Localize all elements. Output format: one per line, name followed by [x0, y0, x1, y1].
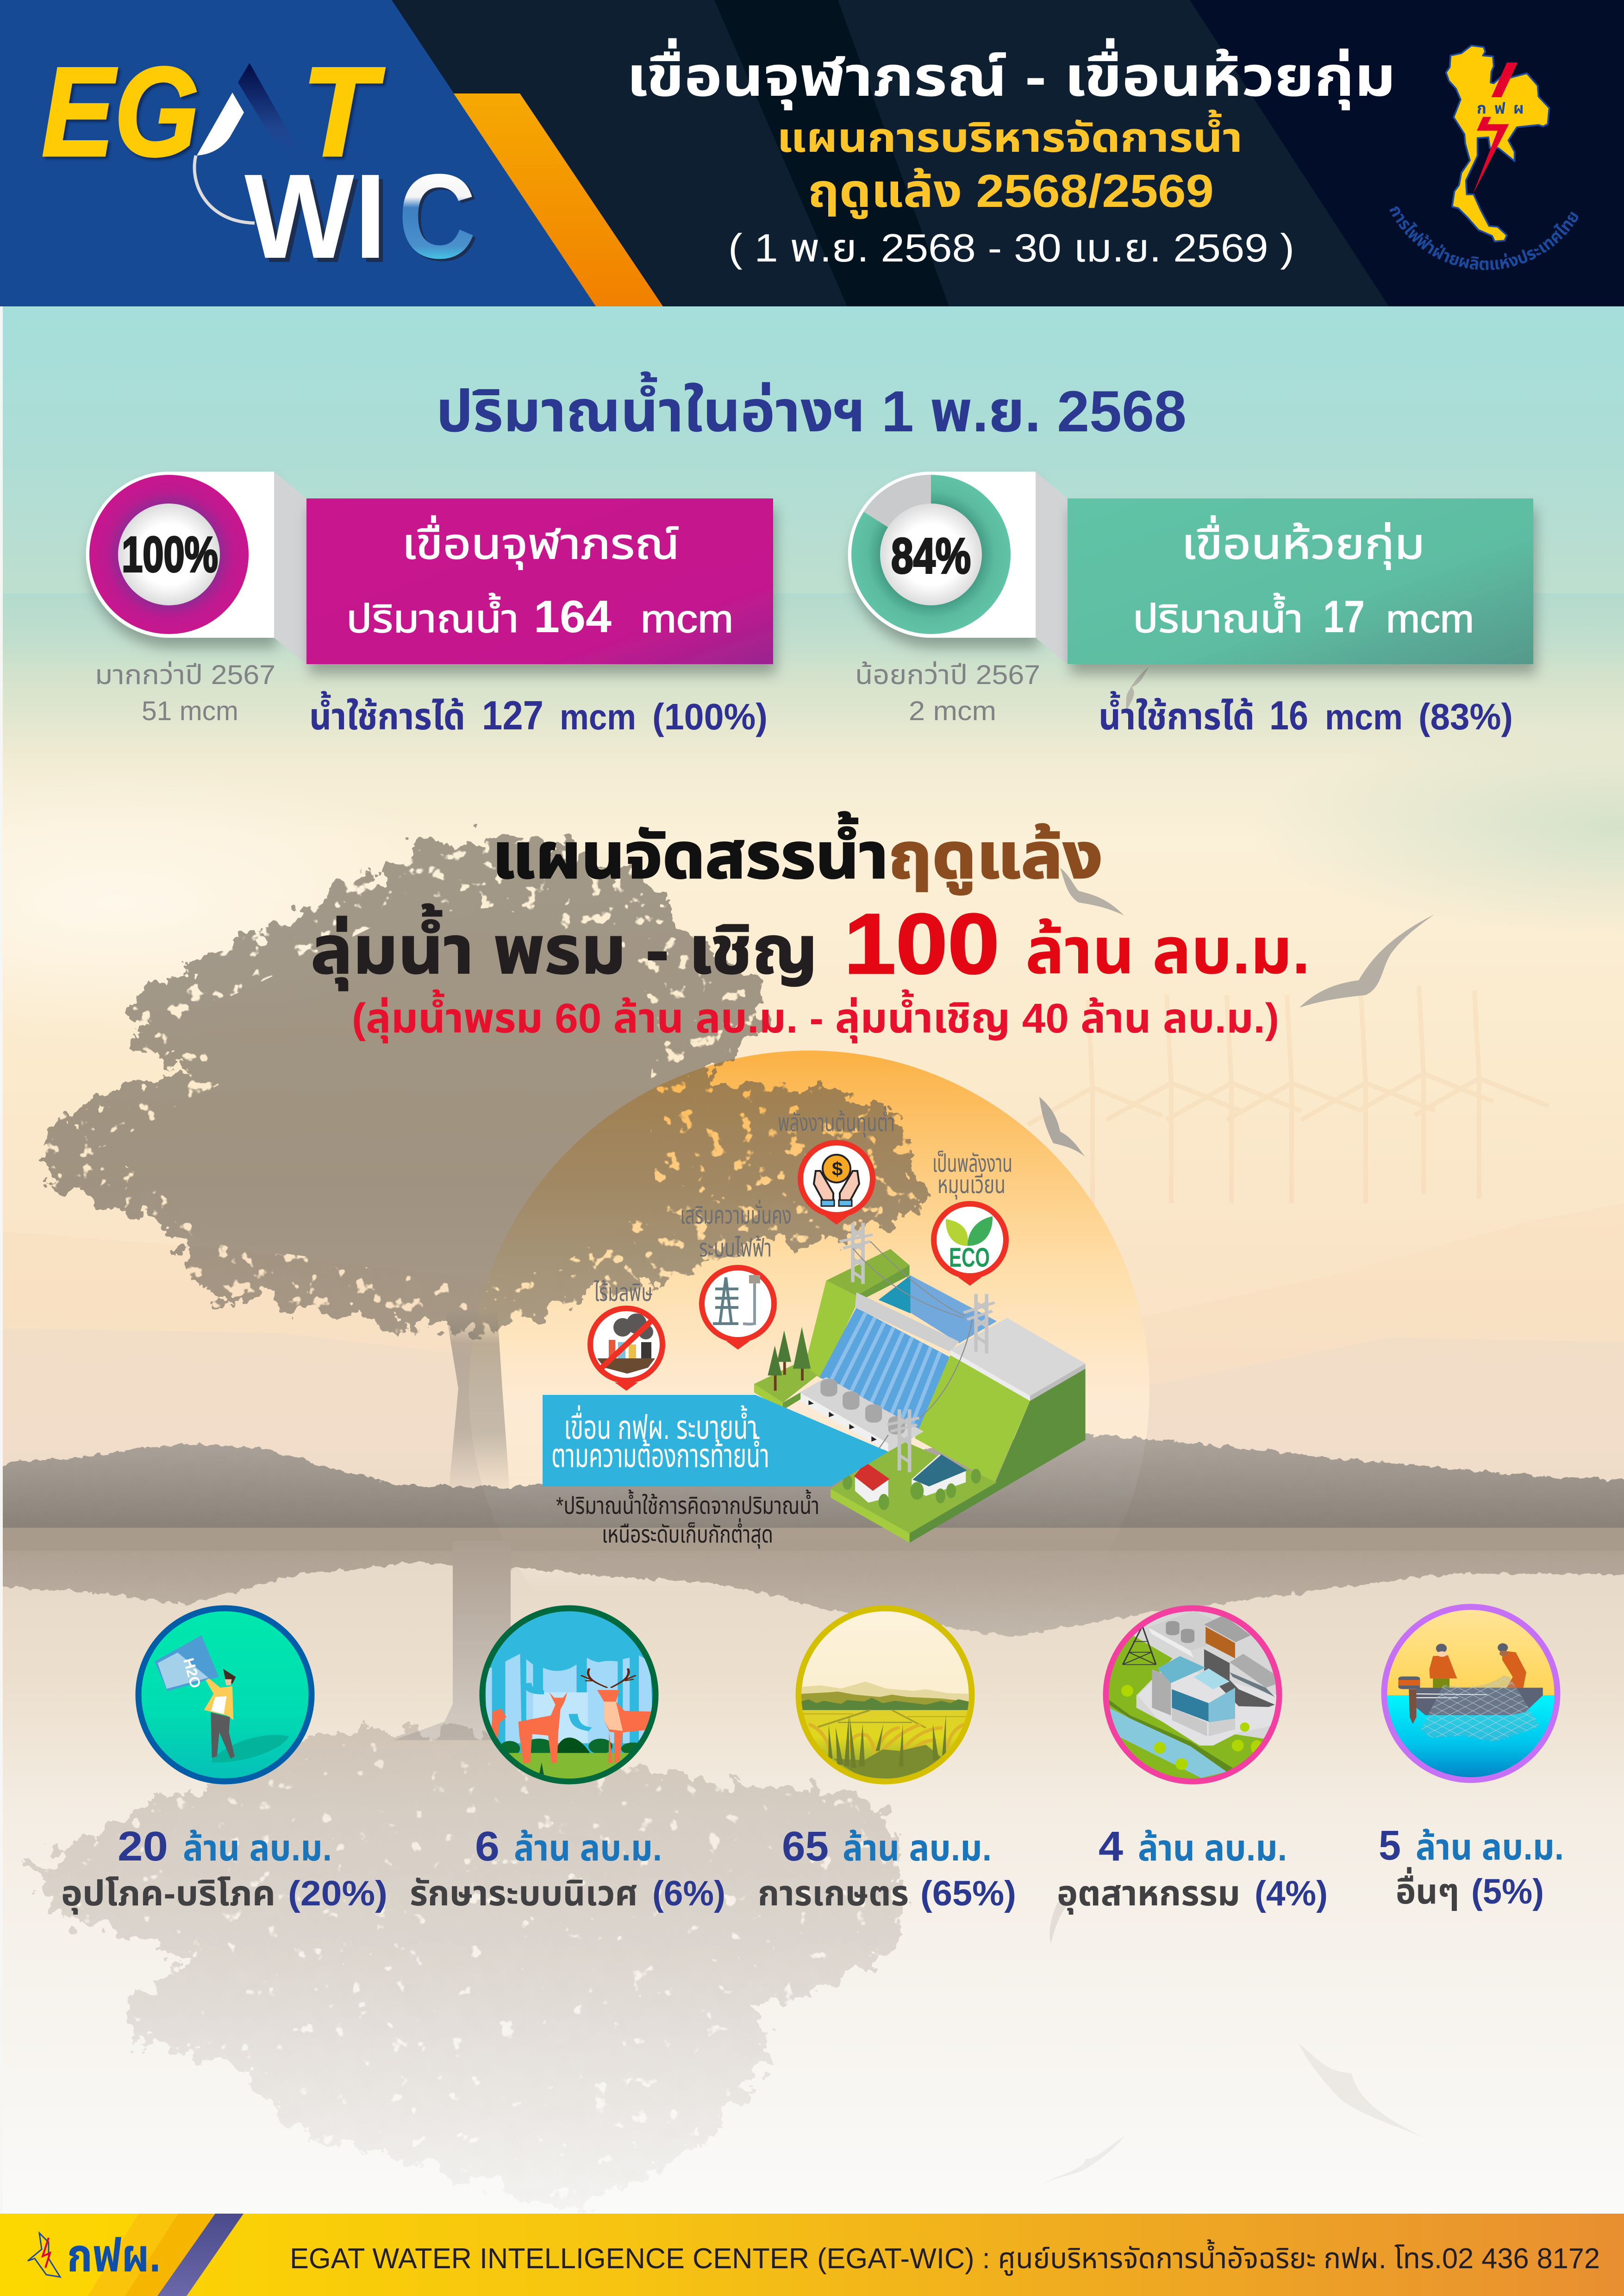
header dark bands [714, 0, 1624, 306]
wind turbines [1028, 986, 1549, 1208]
magenta name box: ปริมาณน้ำ [346, 593, 519, 641]
stat: agriculture 65 [758, 1823, 1016, 1913]
tree reflection [31, 1541, 901, 2209]
EGAT emblem: Thailand map: ก ฟ ผ [1477, 100, 1524, 118]
year comparison: 51 mcm [142, 696, 238, 726]
usage circle: others (fishing) [1384, 1607, 1557, 1783]
donut card 100%: 100% [122, 526, 218, 582]
powerhouse [800, 1377, 924, 1452]
stat: consumption 20: อุปโภค-บริโภค [61, 1874, 275, 1915]
heading: dry season allocation plan: 100 [844, 896, 999, 992]
year comparison [855, 660, 1040, 726]
dam illustration [754, 1223, 1086, 1543]
blue release arrow callout: ตามความต้องการท้ายน้ำ [551, 1433, 769, 1475]
teal name box: mcm [1386, 597, 1474, 641]
pin: renewable eco energy: หมุนเวียน [937, 1171, 1006, 1200]
dam spillway face [819, 1292, 959, 1431]
title lines: ฤดูแล้ง 2568/2569 [808, 165, 1214, 219]
heading: dry season allocation plan: (ลุ่มน้ำพรม 60 ล้าน ลบ.ม. - ลุ่มน้ำเชิญ 40 ล้าน ลบ.ม.) [352, 989, 1279, 1044]
teal name box: ปริมาณน้ำ [1133, 593, 1303, 641]
magenta name box: เขื่อนจุฬาภรณ์ [402, 516, 680, 570]
stat: others 5: 5 [1379, 1823, 1401, 1869]
usable water: 16 [1269, 692, 1308, 738]
usage circle: consumption [138, 1608, 312, 1781]
panel: Huai Kum dam [848, 472, 1533, 738]
magenta name box [306, 498, 773, 664]
usage circle: agriculture [799, 1608, 972, 1781]
usable water: 127 [482, 692, 543, 738]
stat: consumption 20: (20%) [288, 1874, 387, 1913]
distant hills [0, 1203, 1624, 1527]
title lines [626, 38, 1396, 270]
stat: others 5 [1379, 1823, 1564, 1911]
stat: ecosystem 6: (6%) [652, 1874, 725, 1913]
blue logo panel [0, 0, 596, 306]
donut card 84% [848, 472, 1068, 664]
pin: low cost energy: พลังงานต้นทุนต่ำ [778, 1106, 895, 1138]
heading: dry season allocation plan: ฤดูแล้ง [888, 821, 1103, 895]
usable water: mcm [560, 697, 636, 737]
pin: low cost energy: $ [832, 1158, 843, 1180]
panel: Chulabhorn dam [86, 472, 773, 738]
logo: EGAT WIC: C [398, 149, 476, 284]
footer logo: กฟผ. [67, 2230, 161, 2282]
heading: water in reservoirs: ปริมาณน้ำในอ่างฯ 1 พ.ย. 2568 [436, 371, 1187, 444]
small islet with trees [754, 1327, 818, 1410]
horizon water band [0, 1528, 1624, 1551]
left hill [804, 1249, 910, 1379]
teal name box: 17 [1323, 591, 1365, 642]
heading: dry season allocation plan: ล้าน ลบ.ม. [1025, 915, 1310, 987]
stat: consumption 20: ล้าน ลบ.ม. [183, 1828, 332, 1868]
sky glow patches [0, 593, 1624, 1041]
footer stripes [88, 2214, 244, 2296]
bottom land [831, 1440, 1086, 1543]
pin: power system security: เสริมความมั่นคง [680, 1200, 792, 1229]
blue release arrow callout [543, 1395, 888, 1487]
pin: no pollution [590, 1279, 662, 1391]
heading: dry season allocation plan: แผนจัดสรรน้ำ [492, 811, 888, 892]
usage circle: industry [1097, 1608, 1284, 1785]
magenta name box: mcm [641, 597, 733, 641]
year comparison: มากกว่าปี 2567 [95, 660, 275, 690]
pin: renewable eco energy: เป็นพลังงาน [932, 1150, 1012, 1177]
usable water [309, 691, 768, 738]
stat: agriculture 65: ล้าน ลบ.ม. [843, 1828, 992, 1868]
stat: consumption 20 [61, 1823, 387, 1915]
heading: dry season allocation plan: ลุ่มน้ำ พรม - เชิญ [311, 903, 818, 991]
stat: agriculture 65: 65 [782, 1823, 829, 1870]
foreground mountains [0, 1434, 1624, 1541]
title lines: แผนการบริหารจัดการน้ำ [777, 109, 1243, 161]
donut card 100% [86, 472, 306, 664]
usable water: (100%) [652, 696, 768, 737]
stat: industry 4: ล้าน ลบ.ม. [1138, 1828, 1287, 1868]
usable water: น้ำใช้การได้ [309, 691, 465, 737]
sun glow over mountains [469, 1051, 1149, 1731]
pin: no pollution: ไร้มลพิษ [593, 1279, 653, 1307]
footnote [556, 1489, 819, 1549]
right embankment [915, 1318, 1086, 1484]
birds [1039, 666, 1435, 2184]
usage circle: ecosystem [482, 1608, 661, 1781]
blue release arrow callout: เขื่อน กฟผ. ระบายน้ำ [564, 1405, 757, 1446]
heading: dry season allocation plan [311, 811, 1310, 1044]
pin: renewable eco energy: ECO [949, 1243, 990, 1273]
stat: ecosystem 6 [410, 1823, 725, 1913]
stat: industry 4 [1057, 1823, 1328, 1915]
logo: EGAT WIC: T [302, 41, 385, 183]
teal name box [1068, 498, 1533, 664]
year comparison: 2 mcm [909, 696, 996, 726]
stat: industry 4: 4 [1099, 1823, 1123, 1870]
usable water: mcm [1325, 697, 1403, 737]
stat: agriculture 65: การเกษตร [758, 1874, 909, 1913]
tree silhouette [41, 837, 922, 1497]
usage circle: consumption: H2O [180, 1656, 204, 1690]
transmission towers [839, 1223, 994, 1472]
header banner [0, 0, 1624, 306]
title lines: ( 1 พ.ย. 2568 - 30 เม.ย. 2569 ) [728, 226, 1294, 270]
pin: power system security [680, 1200, 792, 1350]
stat: ecosystem 6: ล้าน ลบ.ม. [514, 1828, 662, 1868]
logo: EGAT WIC: EG [42, 41, 199, 183]
year comparison [95, 660, 275, 726]
usable water: (83%) [1418, 696, 1513, 737]
title lines: เขื่อนจุฬาภรณ์ - เขื่อนห้วยกุ่ม [626, 38, 1396, 110]
stat: ecosystem 6: รักษาระบบนิเวศ [410, 1874, 638, 1913]
footnote: *ปริมาณน้ำใช้การคิดจากปริมาณน้ำ [556, 1489, 819, 1519]
footer logo [28, 2230, 161, 2282]
EGAT emblem: Thailand map [1386, 45, 1583, 274]
pin: power system security: ระบบไฟฟ้า [699, 1234, 772, 1262]
donut card 84%: 84% [891, 528, 971, 584]
pin: low cost energy [778, 1106, 895, 1225]
pin: renewable eco energy [932, 1150, 1012, 1286]
magenta name box: 164 [534, 591, 612, 642]
stat: others 5: ล้าน ลบ.ม. [1416, 1827, 1564, 1867]
footer bar [0, 2214, 1624, 2296]
usable water [1099, 691, 1513, 738]
stat: industry 4: (4%) [1255, 1874, 1328, 1913]
left edge strip [0, 306, 3, 2213]
logo: EGAT WIC: WI [244, 149, 387, 284]
reservoir [879, 1276, 997, 1343]
sun circle [469, 1051, 1149, 1731]
teal name box: เขื่อนห้วยกุ่ม [1181, 516, 1425, 570]
stat: others 5: อื่นๆ [1396, 1867, 1459, 1911]
stat: consumption 20: 20 [118, 1823, 168, 1870]
EGAT emblem: Thailand map: การไฟฟ้าฝ่ายผลิตแห่งประเทศไทย [1386, 201, 1583, 274]
stat: ecosystem 6: 6 [475, 1823, 500, 1870]
mountain reflection [0, 1518, 1624, 1636]
year comparison: น้อยกว่าปี 2567 [855, 660, 1040, 690]
logo: EGAT WIC [42, 41, 476, 284]
orange slanted stripe [454, 93, 663, 306]
houses [843, 1455, 981, 1510]
usable water: น้ำใช้การได้ [1099, 691, 1255, 737]
stat: agriculture 65: (65%) [920, 1874, 1016, 1913]
footnote: เหนือระดับเก็บกักต่ำสุด [602, 1518, 773, 1549]
stat: industry 4: อุตสาหกรรม [1057, 1874, 1240, 1915]
stat: others 5: (5%) [1471, 1872, 1544, 1911]
footer text: EGAT WATER INTELLIGENCE CENTER (EGAT-WIC) : ศูนย์บริหารจัดการน้ำอัจฉริยะ กฟผ. โทร.02 436 8172 [290, 2239, 1600, 2276]
